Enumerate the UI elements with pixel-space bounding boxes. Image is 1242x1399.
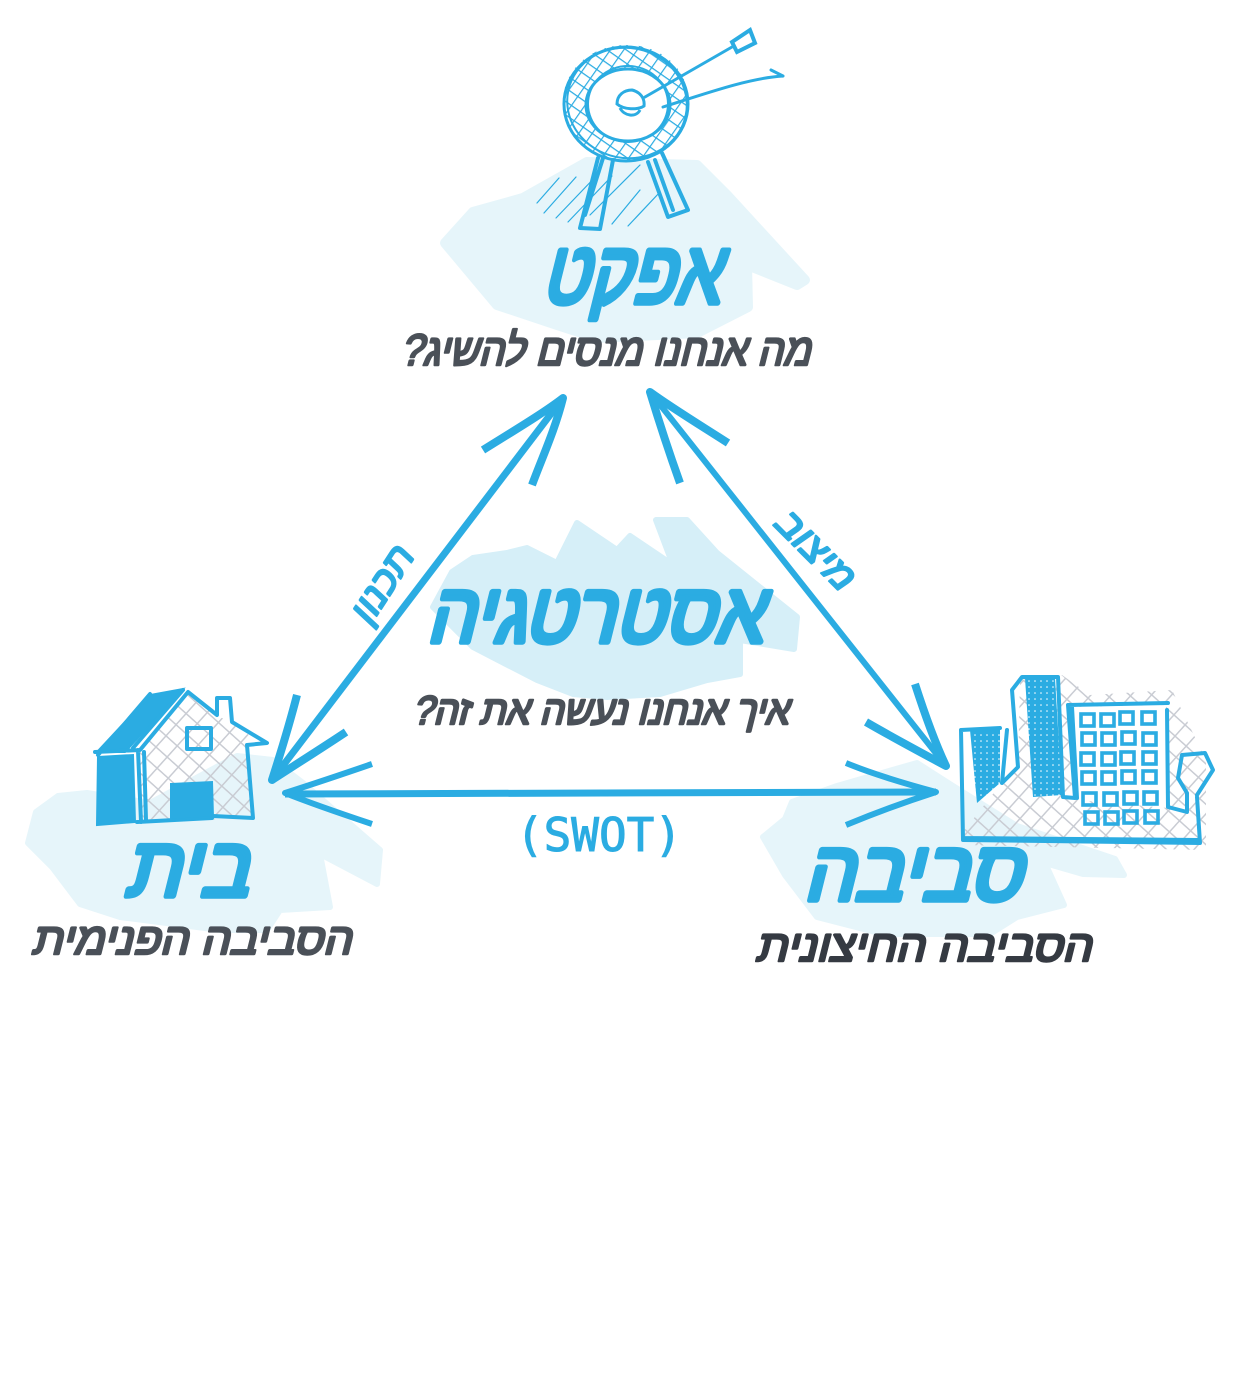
brush patch behind strategy	[433, 520, 797, 697]
brush patch behind home	[28, 756, 380, 930]
panel: effect (top)	[398, 30, 820, 375]
windows	[1081, 712, 1158, 824]
label: SWOT: (SWOT)	[516, 808, 682, 862]
heading: home: בית	[119, 821, 267, 915]
brush patch behind environment	[763, 763, 1124, 934]
heading: strategy: אסטרטגיה	[421, 567, 781, 661]
arrow: right diagonal	[650, 392, 946, 766]
heading: effect: אפקט	[536, 223, 739, 322]
text: what are we trying to achieve: מה אנחנו מנסים להשיג?	[398, 327, 820, 375]
panel: environment (right)	[753, 675, 1213, 971]
icon: city buildings	[961, 675, 1213, 850]
brush patch behind effect	[445, 162, 805, 338]
text: how will we do it: איך אנחנו נעשה את זה?	[410, 688, 797, 733]
text: the internal environment: הסביבה הפנימית	[29, 916, 361, 964]
arrow: horizontal	[285, 763, 936, 825]
label: planning: תכנון	[344, 533, 422, 633]
panel: home (left)	[29, 689, 361, 964]
arrow: left diagonal	[272, 398, 563, 780]
panel: strategy (center)	[410, 567, 797, 733]
label: positioning: מיצוב	[765, 504, 868, 597]
icon: house	[95, 689, 267, 825]
heading: environment: סביבה	[798, 825, 1040, 919]
icon: target with arrows	[537, 30, 783, 229]
text: the external environment: הסביבה החיצונית	[753, 923, 1101, 971]
